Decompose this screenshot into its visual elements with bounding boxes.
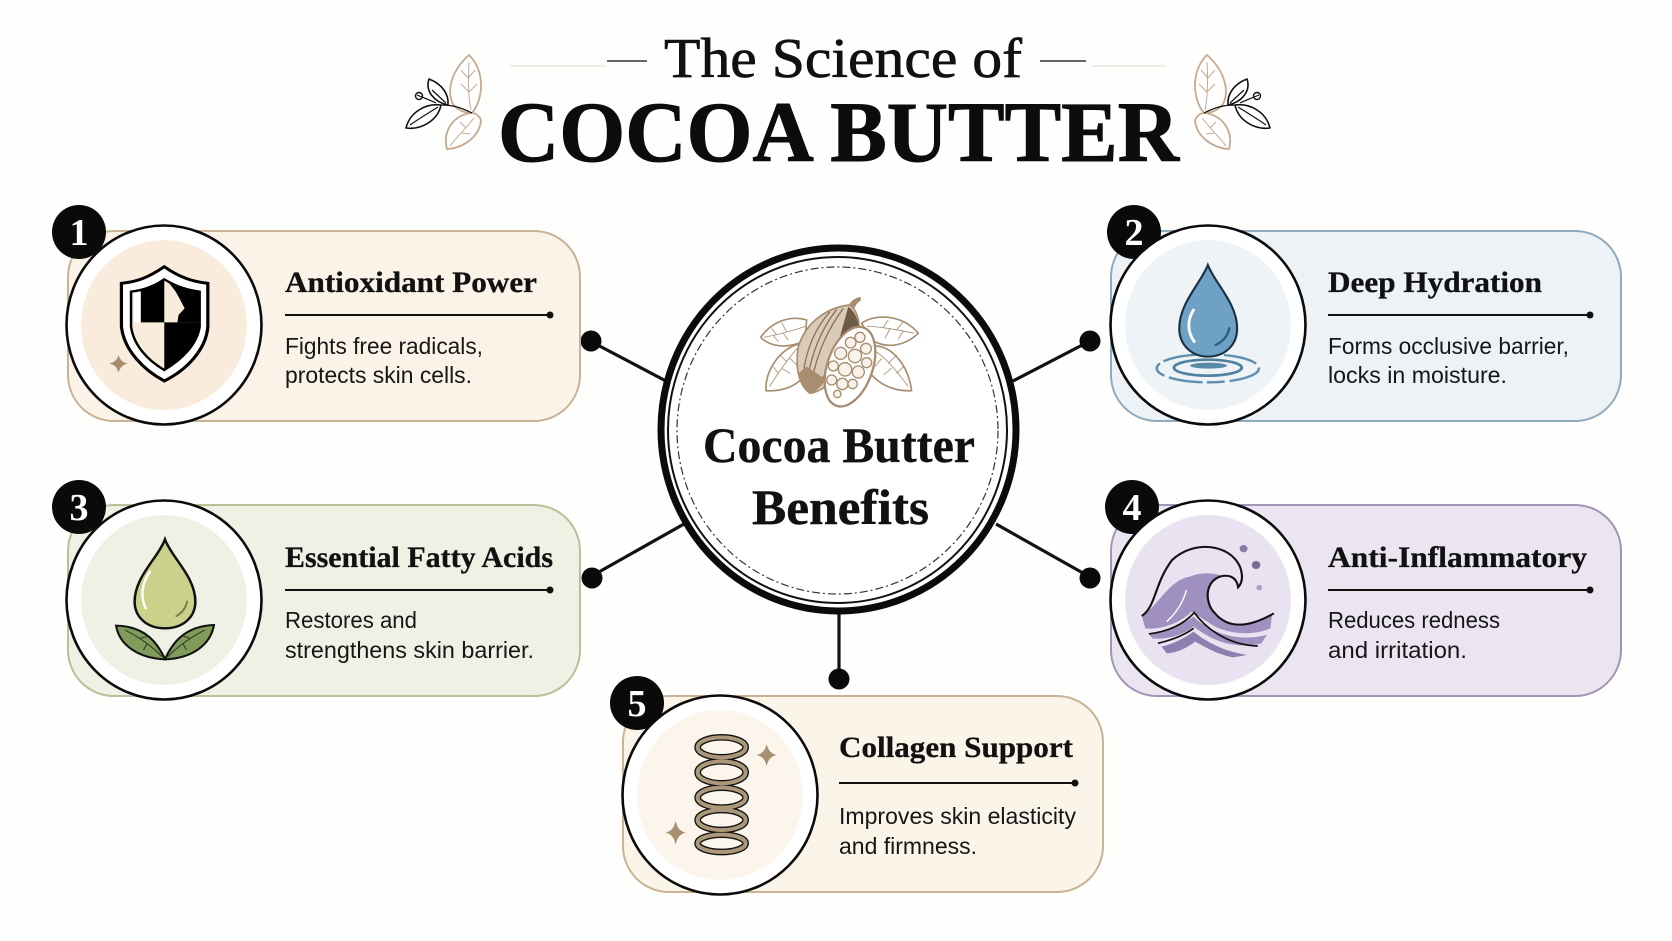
panel: 3 Essential Fatty Acids [52, 480, 580, 700]
badge number 1: 1 [70, 212, 88, 254]
hub label: Benefits: Benefits [752, 479, 929, 535]
title line: COCOA BUTTER: COCOA BUTTER [498, 84, 1180, 180]
badge number 3: 3 [70, 487, 88, 529]
icon: water drop with ripples [1157, 265, 1259, 382]
card heading: Collagen Support [839, 731, 1073, 764]
card description: Improves skin elasticity [839, 803, 1076, 829]
icon: shield [109, 267, 208, 381]
card description: locks in moisture. [1328, 362, 1507, 388]
card heading: Antioxidant Power [285, 266, 537, 299]
card description: protects skin cells. [285, 362, 472, 388]
icon: cocoa pod with leaves [761, 297, 918, 413]
card description [839, 803, 1076, 859]
card description [1328, 333, 1569, 388]
card description: Fights free radicals, [285, 333, 483, 359]
icon: wave [1142, 545, 1274, 657]
card heading: Deep Hydration [1328, 266, 1542, 299]
hub label: Cocoa Butter: Cocoa Butter [703, 417, 975, 473]
panel: 2 Deep Hydration [1107, 205, 1621, 424]
card description [285, 607, 534, 663]
panel: 5 Collagen Support [610, 676, 1103, 894]
icon: oil drop with leaves [116, 539, 214, 659]
panel: 1 Antioxidant Power [52, 205, 580, 424]
card description: strengthens skin barrier. [285, 637, 534, 663]
card heading: Anti-Inflammatory [1328, 541, 1587, 574]
icon: right leaf sprig [1195, 55, 1270, 149]
card description: and irritation. [1328, 637, 1467, 663]
central hub: Cocoa Butter Benefits [661, 248, 1016, 611]
card heading: Essential Fatty Acids [285, 541, 553, 574]
panel: 4 Anti-Inflammatory [1105, 480, 1621, 700]
card description: Reduces redness [1328, 607, 1500, 633]
card description: and firmness. [839, 833, 977, 859]
card description [1328, 607, 1500, 663]
title: The Science of Cocoa Butter [498, 28, 1180, 180]
title line: The Science of: The Science of [664, 28, 1022, 90]
connectors from hub to cards [580, 330, 1100, 690]
card description: Forms occlusive barrier, [1328, 333, 1569, 359]
badge number 2: 2 [1124, 212, 1144, 254]
icon: collagen coil [666, 737, 777, 852]
icon: left leaf sprig [406, 55, 481, 149]
card description: Restores and [285, 607, 417, 633]
badge number 5: 5 [628, 683, 646, 725]
card description [285, 333, 483, 388]
badge number 4: 4 [1122, 487, 1142, 529]
